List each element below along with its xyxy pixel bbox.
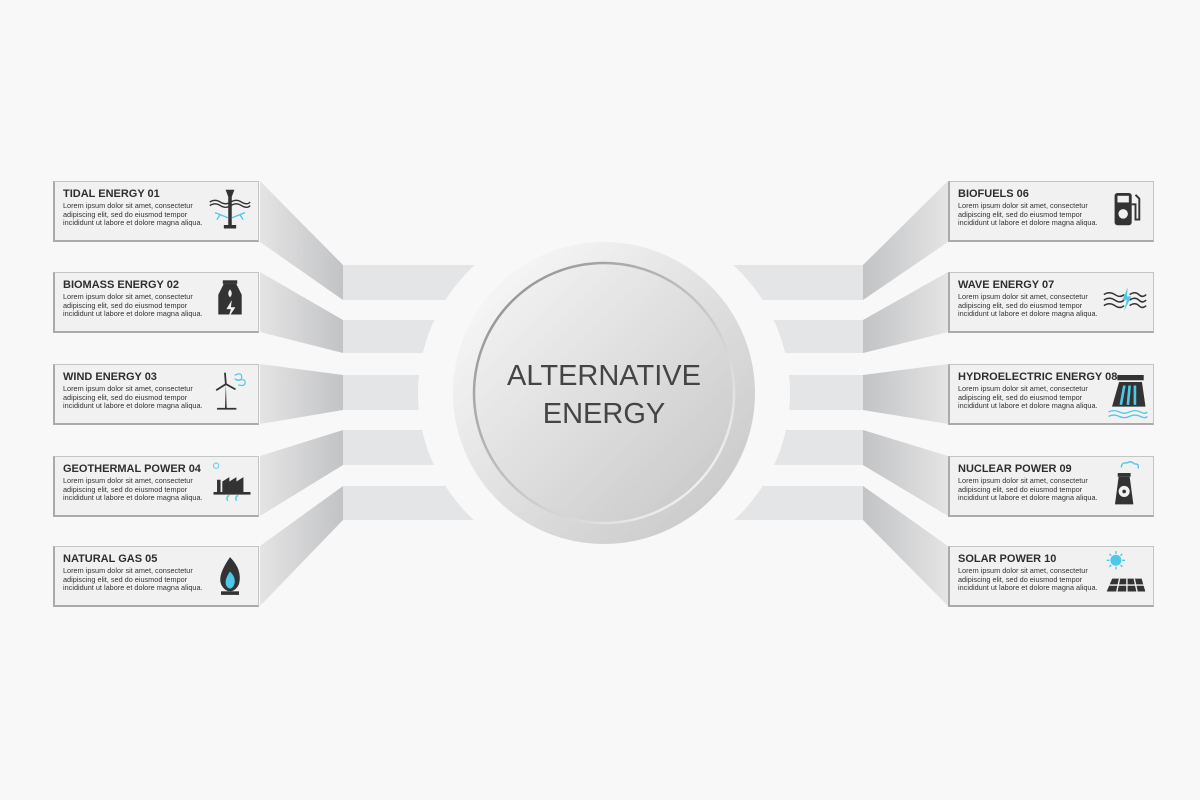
icon: sun and panel: [1106, 551, 1146, 592]
panel: tidal energy: [53, 181, 259, 242]
icon: waves and bolt: [1104, 288, 1147, 311]
panel: biomass energy: [53, 272, 259, 333]
panel: nuclear power: NUCLEAR POWER 09: [958, 463, 1072, 475]
icon: fuel pump: [1114, 193, 1140, 226]
panel: wave energy: WAVE ENERGY 07: [958, 279, 1054, 291]
icon: biomass: [218, 280, 242, 314]
panel: natural gas: Lorem ipsum dolor sit amet, consectetur adipiscing elit, sed do eiusmod tempor incididunt ut labore et dolore magna aliqua.: [63, 566, 203, 592]
panel: wind energy: [53, 364, 259, 425]
panel: tidal energy: Lorem ipsum dolor sit amet, consectetur adipiscing elit, sed do eiusmod tempor incididunt ut labore et dolore magna aliqua.: [63, 201, 203, 227]
panel: solar power: SOLAR POWER 10: [958, 553, 1056, 565]
central circle: [453, 242, 755, 544]
title: ALTERNATIVE: [507, 360, 701, 392]
icon: dam: [1108, 375, 1148, 418]
panel: hydroelectric energy: Lorem ipsum dolor sit amet, consectetur adipiscing elit, sed do eiusmod tempor incididunt ut labore et dolore magna aliqua.: [958, 384, 1098, 410]
icon: tidal turbine: [210, 190, 251, 228]
panel: hydroelectric energy: HYDROELECTRIC ENERGY 08: [958, 371, 1117, 383]
panel: nuclear power: Lorem ipsum dolor sit amet, consectetur adipiscing elit, sed do eiusmod tempor incididunt ut labore et dolore magna aliqua.: [958, 476, 1098, 502]
panel: biofuels: BIOFUELS 06: [958, 188, 1029, 200]
panel: biofuels: Lorem ipsum dolor sit amet, consectetur adipiscing elit, sed do eiusmod tempor incididunt ut labore et dolore magna aliqua.: [958, 201, 1098, 227]
panel: wind energy: WIND ENERGY 03: [63, 371, 157, 383]
panel: wave energy: [948, 272, 1154, 333]
panel: geothermal power: Lorem ipsum dolor sit amet, consectetur adipiscing elit, sed do eiusmod tempor incididunt ut labore et dolore magna aliqua.: [63, 476, 203, 502]
right connectors: [713, 181, 948, 606]
panel: solar power: [948, 546, 1154, 607]
icon: nuclear plant: [1115, 461, 1140, 504]
panel: biomass energy: BIOMASS ENERGY 02: [63, 279, 179, 291]
panel: solar power: Lorem ipsum dolor sit amet, consectetur adipiscing elit, sed do eiusmod tempor incididunt ut labore et dolore magna aliqua.: [958, 566, 1098, 592]
icon: gas flame: [220, 557, 240, 595]
title line 2: ENERGY: [543, 398, 665, 430]
icon: geothermal: [213, 462, 250, 502]
panel: natural gas: [53, 546, 259, 607]
panel: tidal energy: TIDAL ENERGY 01: [63, 188, 160, 200]
panel: wind energy: Lorem ipsum dolor sit amet, consectetur adipiscing elit, sed do eiusmod tempor incididunt ut labore et dolore magna aliqua.: [63, 384, 203, 410]
left connectors: [260, 181, 493, 606]
panel: wave energy: Lorem ipsum dolor sit amet, consectetur adipiscing elit, sed do eiusmod tempor incididunt ut labore et dolore magna aliqua.: [958, 292, 1098, 318]
panel: geothermal power: GEOTHERMAL POWER 04: [63, 463, 201, 475]
panel: geothermal power: [53, 456, 259, 517]
panel: nuclear power: [948, 456, 1154, 517]
panel: hydroelectric energy: [948, 364, 1154, 425]
icon: wind turbine: [216, 372, 246, 410]
panel: natural gas: NATURAL GAS 05: [63, 553, 157, 565]
panel: biomass energy: Lorem ipsum dolor sit amet, consectetur adipiscing elit, sed do eiusmod tempor incididunt ut labore et dolore magna aliqua.: [63, 292, 203, 318]
panel: biofuels: [948, 181, 1154, 242]
